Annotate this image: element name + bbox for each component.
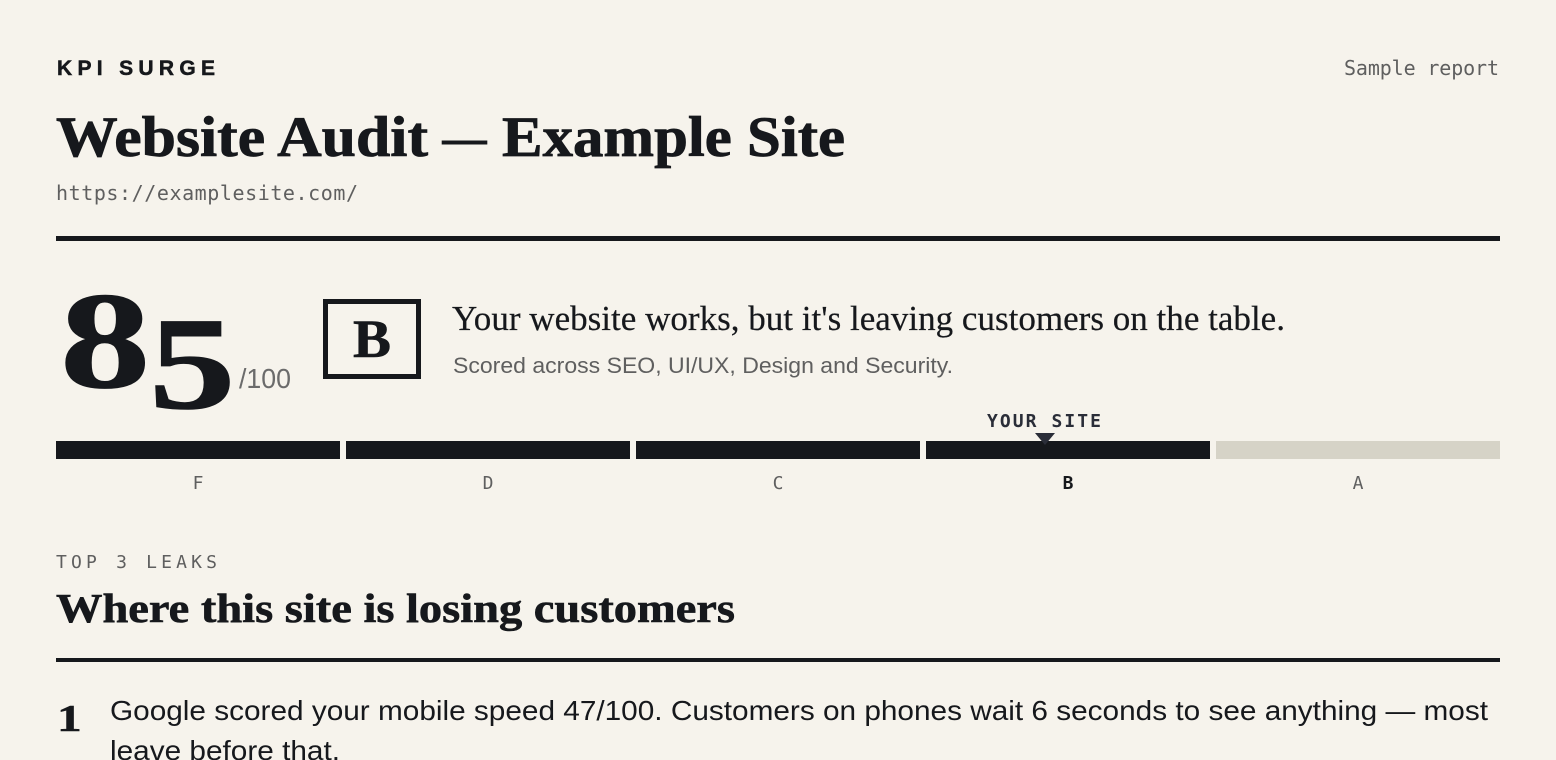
leak description: Google scored your mobile speed 47/100. Customers on phones wait 6 seconds to see anything — most	[110, 695, 1488, 726]
title: Website Audit	[56, 106, 428, 169]
section eyebrow: TOP 3 LEAKS	[56, 552, 217, 573]
marker triangle	[1035, 433, 1055, 445]
score 85: 5	[149, 291, 235, 437]
grade segment B	[926, 441, 1210, 459]
grade scale	[56, 411, 1500, 494]
leak number: 1	[57, 697, 82, 740]
grade segment A	[1216, 441, 1500, 459]
brand name: KPI SURGE	[57, 57, 215, 80]
section heading: Where this site is losing customers	[56, 585, 735, 631]
leak item 1	[57, 695, 1488, 760]
grade badge: B	[353, 309, 391, 369]
label A: A	[1353, 473, 1364, 494]
verdict headline: Your website works, but it's leaving customers on the table.	[452, 299, 1285, 338]
title: Example Site	[502, 106, 845, 169]
title	[56, 106, 845, 169]
grade segment D	[346, 441, 630, 459]
your site label: YOUR SITE	[987, 411, 1101, 432]
verdict subtext: Scored across SEO, UI/UX, Design and Security.	[453, 353, 953, 378]
score denominator: /100	[239, 363, 291, 394]
score panel	[60, 264, 1285, 437]
grade segment F	[56, 441, 340, 459]
label B: B	[1063, 473, 1074, 494]
sample report tag: Sample report	[1344, 56, 1499, 80]
title: —	[441, 106, 488, 169]
site url: https://examplesite.com/	[56, 181, 358, 205]
label F: F	[193, 473, 203, 494]
label C: C	[773, 473, 783, 494]
grade badge	[326, 302, 418, 376]
score 85: 8	[60, 264, 150, 417]
grade segment C	[636, 441, 920, 459]
score 85	[60, 264, 235, 437]
label D: D	[483, 473, 493, 494]
